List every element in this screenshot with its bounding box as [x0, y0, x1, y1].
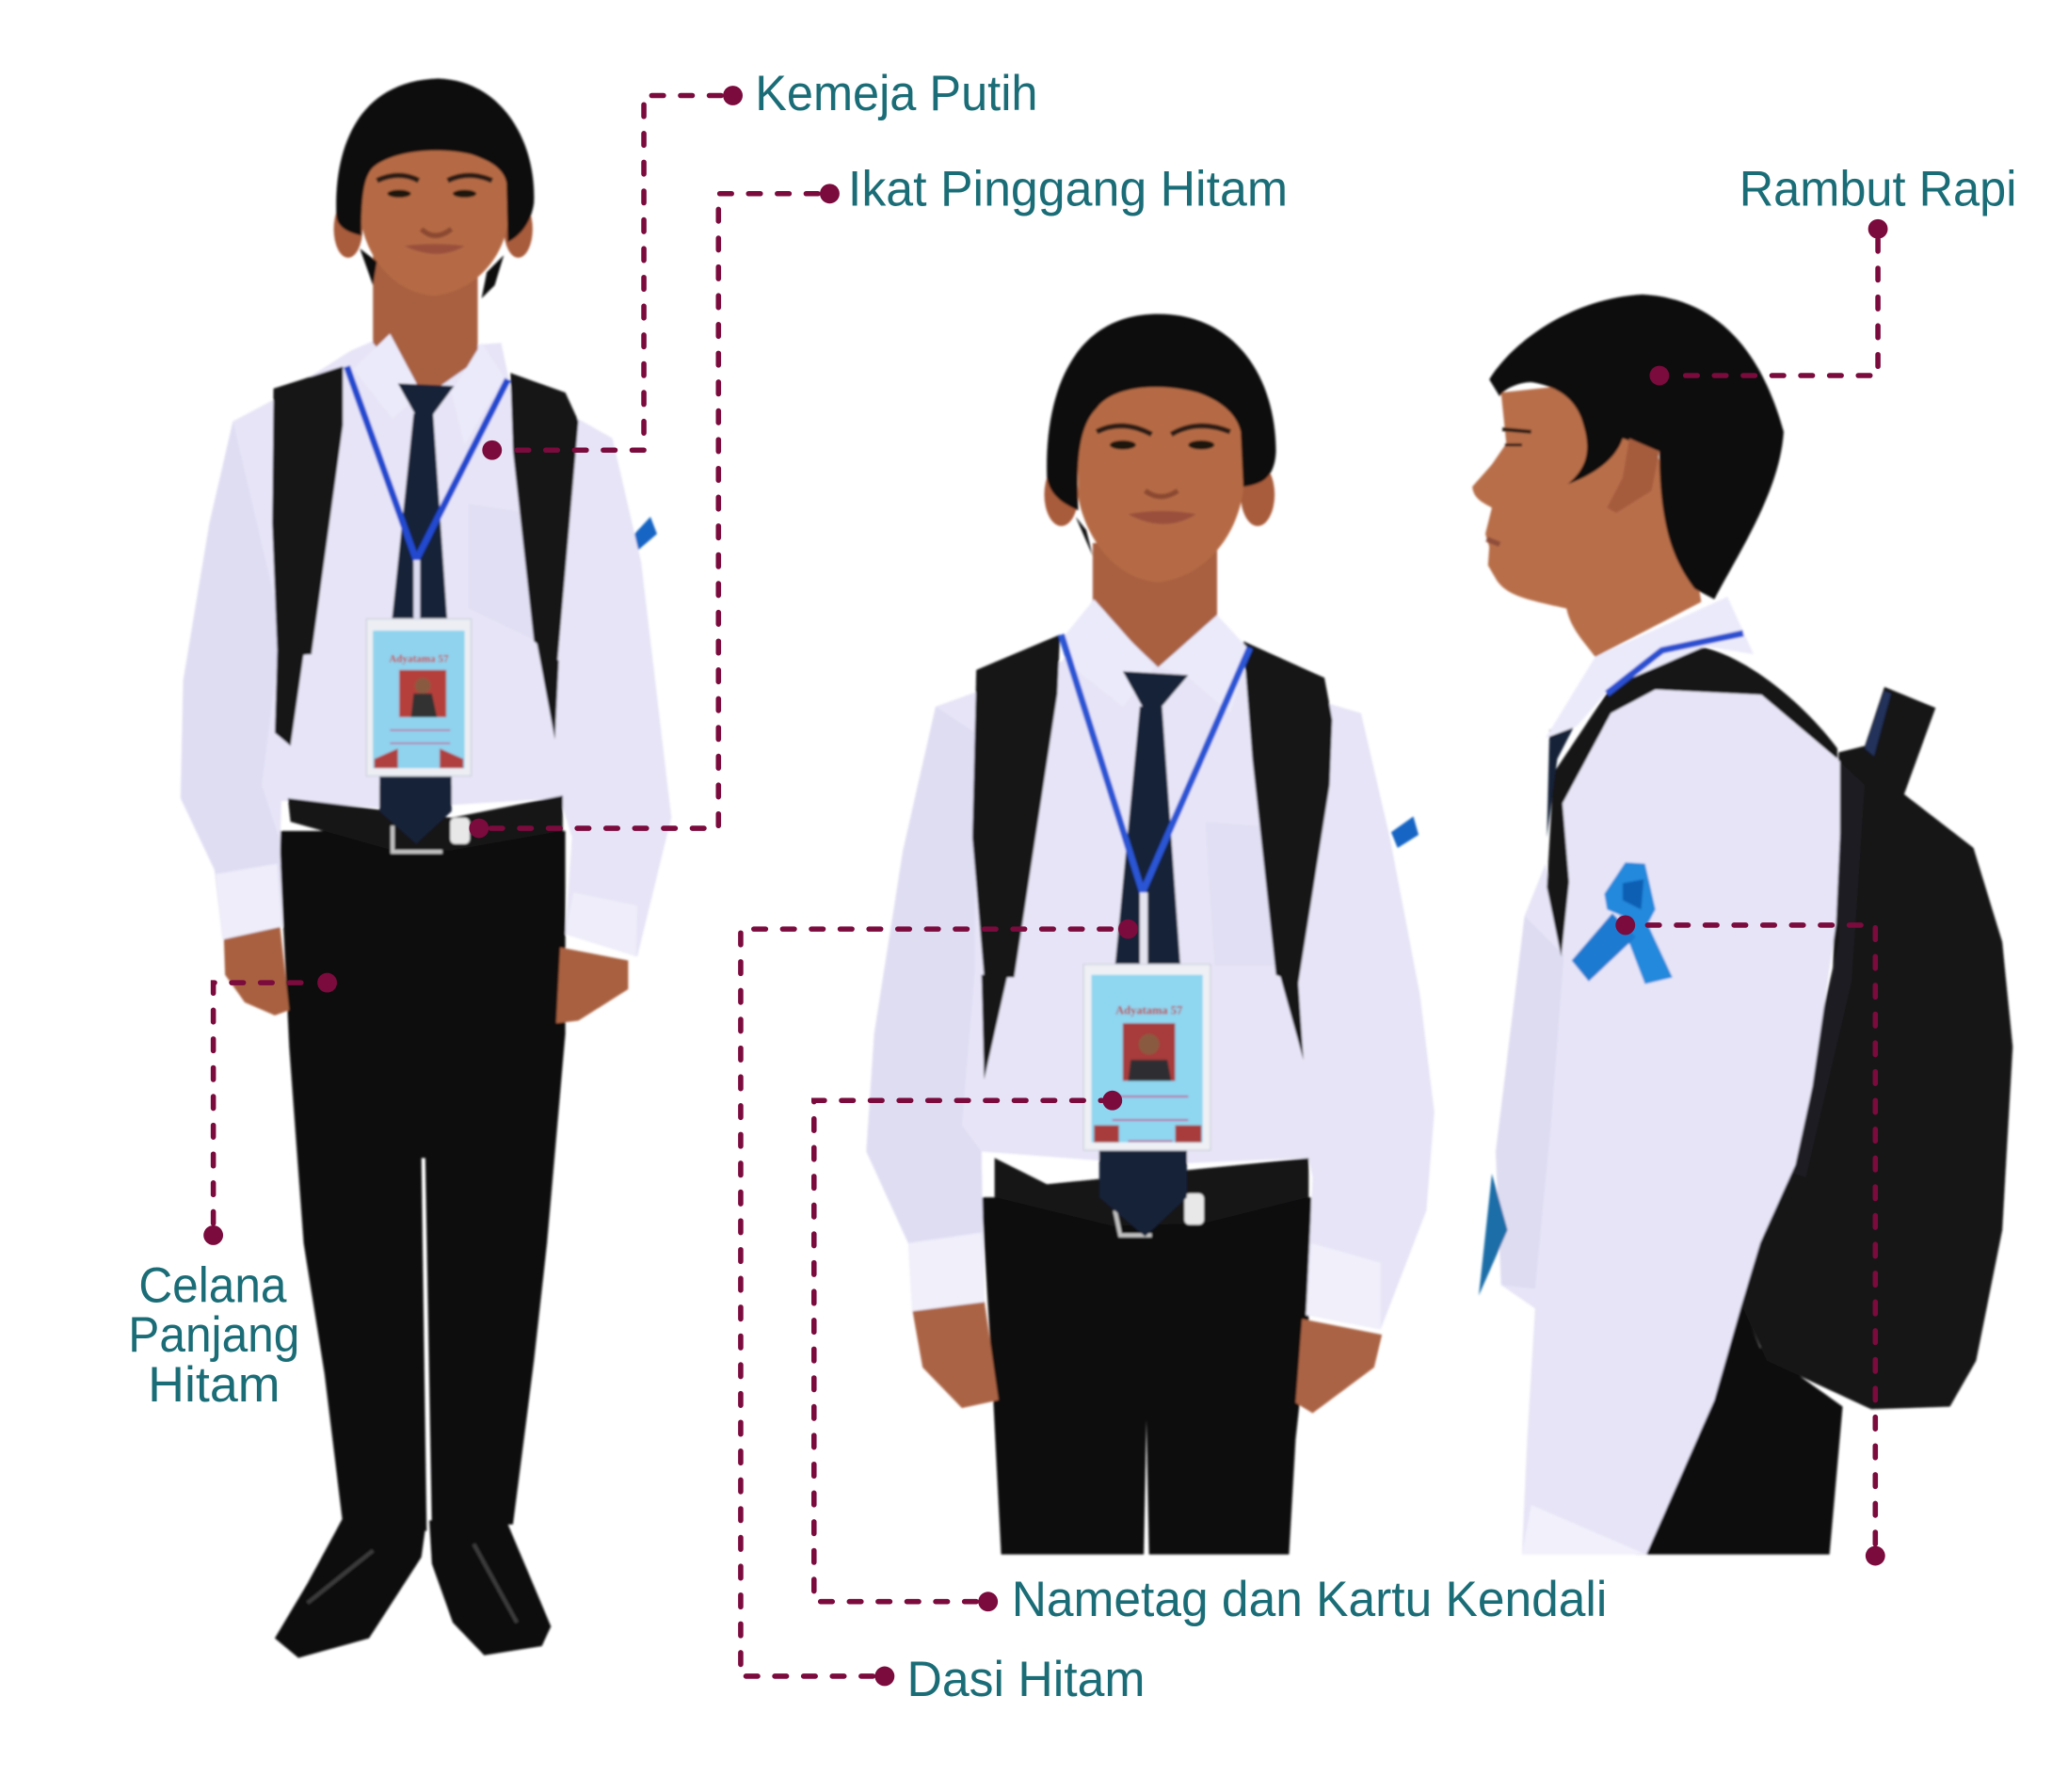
- callout: Nametag dan Kartu Kendali: Nametag dan Kartu Kendali: [1012, 1572, 1607, 1627]
- callout: Ikat Pinggang Hitam: Ikat Pinggang Hitam: [848, 161, 1288, 216]
- trousers: [1512, 1270, 1843, 1555]
- right-side ribbon tip: [633, 517, 657, 551]
- white shirt: [1496, 690, 1840, 1555]
- figure: side view with backpack: [1472, 295, 2012, 1555]
- white shirt: [181, 334, 671, 956]
- lanyard: [1607, 633, 1743, 694]
- belt: [995, 1158, 1308, 1235]
- arm ribbon tip: [1391, 817, 1419, 848]
- tie tip over belt: [1099, 1151, 1187, 1237]
- lanyard: [346, 366, 507, 560]
- hands: [912, 1300, 1382, 1414]
- callout: Celana Panjang Hitam: Panjang: [128, 1307, 299, 1363]
- lanyard: [1062, 634, 1250, 892]
- shoes: [275, 1518, 551, 1657]
- callout: Dasi Hitam: Dasi Hitam: [906, 1652, 1146, 1707]
- black tie: [1099, 671, 1188, 1237]
- tie tip over belt: [379, 785, 452, 844]
- callout: Celana Panjang Hitam: Hitam: [148, 1357, 281, 1413]
- backpack shoulder strap: [1547, 648, 1837, 956]
- trousers: [982, 1197, 1311, 1555]
- collar: [353, 334, 422, 419]
- callout: Ikat Pinggang Hitam: [469, 161, 1288, 838]
- head: [1044, 314, 1276, 583]
- name card: [366, 619, 472, 776]
- collar: [1060, 600, 1154, 707]
- backpack: [1714, 687, 2012, 1409]
- callout: Kemeja Putih: Kemeja Putih: [755, 66, 1038, 121]
- name card: Adyatama 57: [389, 653, 449, 664]
- black trousers: [279, 831, 566, 1531]
- callout: Celana Panjang Hitam: Celana: [138, 1257, 287, 1313]
- callout: Rambut Rapi: [1649, 161, 2016, 385]
- callout: Dasi Hitam: [741, 920, 1146, 1707]
- white shirt: [866, 600, 1435, 1330]
- blue ribbon: [1572, 862, 1673, 984]
- backpack straps: [272, 366, 579, 745]
- dangling card edge: [1479, 1174, 1508, 1295]
- head: [334, 78, 534, 298]
- figure: upper-body front view: [866, 314, 1435, 1555]
- black tie: [379, 383, 454, 844]
- collar: [1546, 597, 1754, 738]
- neck: [373, 255, 477, 399]
- callout: Celana Panjang Hitam: [128, 973, 337, 1413]
- callout: ribbon pointer: [1615, 916, 1885, 1565]
- name card: [1083, 965, 1210, 1150]
- belt: [288, 795, 563, 852]
- callout: Nametag dan Kartu Kendali: [814, 1091, 1607, 1627]
- backpack straps: [972, 634, 1332, 1080]
- name card: Adyatama 57: [1115, 1003, 1182, 1016]
- neck: [1093, 543, 1217, 667]
- tie seen from side: [1547, 713, 1580, 838]
- callout: Kemeja Putih: [482, 66, 1038, 460]
- figure: full-body front view: [181, 78, 671, 1657]
- callout: Rambut Rapi: Rambut Rapi: [1739, 161, 2016, 216]
- head: [1472, 295, 1784, 657]
- hands: [224, 926, 628, 1023]
